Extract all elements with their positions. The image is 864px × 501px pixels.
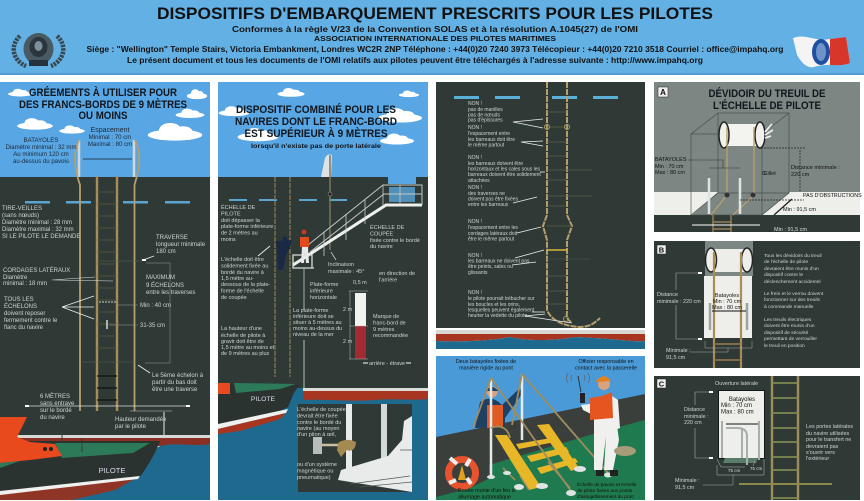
callout group 6: les barreaux ne doivent pas <box>468 258 530 264</box>
panel: deck arrangement <box>436 356 645 500</box>
label: officier <box>575 359 637 372</box>
labels: Œillet <box>762 171 776 177</box>
heading <box>19 86 187 122</box>
callout group 3 <box>468 155 545 184</box>
text block: du navire utilisées <box>806 431 849 437</box>
badge C: C <box>659 380 665 388</box>
label: 5e échelon: Le 5ème échelon à <box>152 373 204 379</box>
distance label: 220 cm <box>684 420 702 426</box>
ropes <box>711 127 754 215</box>
deck fittings <box>487 466 612 496</box>
callout group 1: pas de nœuds <box>468 112 500 118</box>
stanchions and ropes <box>473 374 608 491</box>
freeboard mark: 2 m <box>343 307 353 313</box>
badge A <box>658 87 668 97</box>
label: cordages latéraux <box>3 267 113 287</box>
freeboard mark <box>343 280 411 367</box>
label: batayoles: Au minimum 120 cm <box>13 151 69 158</box>
label: échelle de pilote: de 2 mètres au <box>221 230 258 236</box>
manhole <box>614 446 636 456</box>
text block: s'ouvrir vers <box>806 450 835 456</box>
ropes and rungs <box>714 252 741 368</box>
header banner <box>0 0 864 75</box>
lifebuoy <box>448 458 476 486</box>
distance label <box>657 272 704 340</box>
heading: EST SUPÉRIEUR À 9 MÈTRES <box>244 127 388 140</box>
label: échelle de pavois: de pilote fixées aux points <box>577 488 633 494</box>
association name: ASSOCIATION INTERNATIONALE DES PILOTES MARITIMES <box>314 34 556 43</box>
stanchion spacing label: Batayoles <box>715 293 739 299</box>
labels <box>655 157 862 233</box>
callout group 7 <box>468 290 572 323</box>
clouds <box>219 88 422 144</box>
inset: securing detail: pneumatique) <box>297 475 331 481</box>
minimum width label: 91,5 cm <box>675 485 695 491</box>
stanchions <box>710 303 747 330</box>
label: échelle de coupée: fixée contre le bordé <box>370 238 420 244</box>
label: plate-forme inférieure hauteur: niveau de la mer <box>293 332 334 338</box>
callout group 6: être peints, sales ou <box>468 264 513 270</box>
stanchion spacing label <box>712 293 746 311</box>
label: plate-forme inférieure hauteur: moins au-dessus du <box>293 326 342 332</box>
text block <box>806 424 853 462</box>
text block: devraient pas <box>806 444 839 450</box>
stanchion spacing label: Max : 80 cm <box>712 305 742 311</box>
deck dashes <box>229 199 347 201</box>
label: tire-veilles: (sans nœuds) <box>2 213 39 219</box>
label: fixation of ladder: 1,5 mètre au- <box>221 276 254 282</box>
labels: Min : 91,5 cm <box>774 227 807 233</box>
label: hauteur demandée <box>115 411 172 445</box>
label: batayoles: BATAYOLES <box>24 137 58 144</box>
label: tous les échelons <box>4 296 94 331</box>
freeboard mark: 9 mètres <box>373 327 395 333</box>
freeboard mark: 2 m <box>343 339 353 345</box>
stanchions <box>688 160 756 214</box>
heading: NAVIRES DONT LE FRANC-BORD <box>235 116 397 128</box>
reel <box>706 248 752 272</box>
label: batayoles <box>5 137 77 165</box>
text block: de l'échelle de pilote <box>764 259 808 265</box>
heading: L'ÉCHELLE DE PILOTE <box>713 99 821 112</box>
label: fixation of ladder: bordé du navire à <box>221 270 265 276</box>
inset: securing detail: d'un piton à œil, <box>297 432 336 438</box>
callout group 7: NON ! <box>468 290 482 296</box>
label: échelle de coupée: COUPÉE <box>370 230 394 238</box>
label: échelle de pilote: doit dépasser la <box>221 218 261 224</box>
officer figure <box>300 230 309 263</box>
text block: doivent être munis d'un <box>764 323 815 329</box>
text block: le treuil en position <box>764 343 805 349</box>
heading <box>235 103 397 150</box>
label: échelle de pilote <box>221 204 273 256</box>
ship hull and sea <box>218 383 428 500</box>
icon: IMO emblem <box>14 33 63 66</box>
freeboard mark: 0,5 m <box>353 280 367 286</box>
label: inclinaison <box>328 252 364 275</box>
label: traverse <box>142 235 206 261</box>
clouds <box>8 89 207 141</box>
distance label <box>684 391 713 459</box>
callout group 7: les boucles et les orins, <box>468 302 520 308</box>
callout group 5: l'espacement entre les <box>468 225 518 231</box>
label: plate-forme inférieure hauteur: inférieure doit se <box>293 314 334 320</box>
label: cordages latéraux: Diamètre <box>3 275 28 281</box>
label: échelle de pilote: moins <box>221 237 236 243</box>
distance label: minimale : <box>684 414 709 420</box>
wire box <box>691 113 789 215</box>
door opening: Min : 70 cm <box>721 403 752 409</box>
label: inclinaison: Inclinaison <box>328 262 354 268</box>
label: batayoles <box>456 359 516 372</box>
callout group 4: entre les barreaux <box>468 202 509 208</box>
distance label: Distance <box>657 292 678 298</box>
labels: Min : 91,5 cm <box>783 207 816 213</box>
pilot ladder diagram <box>75 140 142 411</box>
heading: DES FRANCS-BORDS DE 9 MÈTRES <box>19 98 187 111</box>
door opening <box>718 390 765 465</box>
defective ladder <box>543 82 600 327</box>
callout group 6: NON ! <box>468 253 482 259</box>
ship hull and sea: PILOTE <box>251 396 276 403</box>
hull strip <box>436 330 645 349</box>
dimensions under door: 75 cm <box>728 468 741 473</box>
callout group 5 <box>468 219 541 242</box>
callout group 1: pas de manilles <box>468 107 503 113</box>
door opening: Max : 80 cm <box>721 410 754 416</box>
callout group 7: heurter la vedette du pilote <box>468 313 527 319</box>
text block: devraient être munis d'un <box>764 266 819 272</box>
label: batayoles: Diamètre minimal : 32 mm <box>5 144 77 151</box>
label: fixation of ladder: L'échelle doit être <box>221 257 264 263</box>
labels: BATAYOLES <box>655 157 687 163</box>
text block: Les portes latérales <box>806 424 853 430</box>
door opening: Batayoles <box>729 397 755 403</box>
callout group 2: les barreaux doit être <box>468 137 515 143</box>
text block: Tous les dévidoirs du treuil <box>764 253 822 259</box>
label: tous les échelons: fermement contre le <box>4 318 58 324</box>
dimensions: rung length and spacing: Min : 40 cm <box>140 303 171 309</box>
heading: DÉVIDOIR DU TREUIL DE <box>708 87 826 100</box>
address line: Siège : "Wellington" Temple Stairs, Victoria Embankment, Londres WC2R 2NP Téléphone : +44(0)20 7240 3973 Télécopieur : +44(0)20 7210 3518 Courriel : office@impahq.org <box>86 45 784 54</box>
inset: securing detail: ou d'un système <box>297 462 337 468</box>
inset: securing detail: navire (au moyen <box>297 426 340 432</box>
callout group 3: NON ! <box>468 155 482 161</box>
label: tous les échelons: ÉCHELONS <box>4 303 37 310</box>
label: 6 mètres <box>25 393 190 421</box>
label: batayoles: au-dessus du pavois <box>13 158 69 165</box>
callout group 5: NON ! <box>468 219 482 225</box>
heading: GRÉEMENTS À UTILISER POUR <box>29 86 177 99</box>
label: fixation of ladder: forme de l'échelle <box>221 288 264 294</box>
inset: securing detail: contre le bordé du <box>297 420 341 426</box>
spacing dimension <box>83 127 132 159</box>
reel <box>719 122 773 148</box>
minimum width label: Minimale : <box>666 348 691 354</box>
label: tire-veilles: Diamètre maximal : 32 mm <box>2 227 74 233</box>
download line: Le présent document et tous les documents de l'OMI relatifs aux pilotes peuvent être téléchargés à l'adresse suivante : http://www.impahq.org <box>127 56 703 65</box>
text block: à commande manuelle <box>764 304 814 310</box>
label: direction: l'arrière <box>379 278 397 284</box>
distance label: Distance <box>684 407 705 413</box>
label: traverse: longueur minimale <box>156 242 206 248</box>
distance label: minimale : 220 cm <box>657 299 701 305</box>
subtitle: Conformes à la règle V/23 de la Convention SOLAS et à la résolution A.1045(27) de l'OMI <box>232 24 638 34</box>
label: 6 mètres: sur le bordé <box>40 408 72 414</box>
text block: dispositif contre le <box>764 272 803 278</box>
label: cordages latéraux: minimal : 18 mm <box>3 281 47 287</box>
accommodation ladder <box>293 185 422 310</box>
text block: déclenchement accidentel <box>764 279 821 285</box>
badge A: A <box>660 88 666 97</box>
pilot boat and sea <box>0 417 210 500</box>
spacing dimension: Espacement <box>91 127 130 134</box>
label: fixation of ladder: de coupée <box>221 295 247 301</box>
panel: combined arrangement <box>218 82 428 500</box>
label: hauteur échelle: gravir doit être de <box>221 339 264 345</box>
label: tous les échelons: TOUS LES <box>4 297 34 303</box>
label: traverse: 180 cm <box>156 249 176 255</box>
minimum width label <box>666 341 752 361</box>
pilot figure <box>276 236 292 270</box>
label: échelle de pilote: plate-forme inférieure <box>221 224 273 230</box>
dimension lines <box>692 148 805 231</box>
label: traverse: TRAVERSE <box>156 235 188 241</box>
callout group 7: le pilote pourrait trébucher sur <box>468 296 535 302</box>
callout group 5: cordages latéraux doit <box>468 231 518 237</box>
text block: pour le transfert ne <box>806 437 851 443</box>
label: hauteur échelle: de 9 mètres au plus <box>221 351 270 357</box>
panel: prohibited practices <box>436 82 645 349</box>
callout group 6: glissants <box>468 270 488 276</box>
label: tire-veilles: SI LE PILOTE LE DEMANDE <box>2 234 80 240</box>
label: fixation of ladder <box>221 257 270 301</box>
label: tire-veilles: TIRE-VEILLES <box>2 206 42 212</box>
label: hauteur échelle: La hauteur d'une <box>221 326 262 332</box>
heading: DISPOSITIF COMBINÉ POUR LES <box>236 103 396 116</box>
callout group 7: lesquelles peuvent également <box>468 308 535 314</box>
label: batayoles: manière rigide au pont <box>459 366 513 372</box>
heading <box>708 87 826 112</box>
callout group 4: NON ! <box>468 185 482 191</box>
freeboard mark: arrière - étrave <box>369 361 405 367</box>
label: échelle de pavois: d'assujettissement du pont <box>577 494 634 500</box>
label: échelle de pilote: ÉCHELLE DE <box>221 204 256 211</box>
label: direction: en direction de <box>379 271 415 277</box>
title: DISPOSITIFS D'EMBARQUEMENT PRESCRITS POUR LES PILOTES <box>157 5 713 23</box>
label: fixation of ladder: dessous de la plate- <box>221 282 270 288</box>
text block: dispositif de sécurité <box>764 330 809 336</box>
callout group 3: barreaux doivent être solidement <box>468 172 541 178</box>
davit <box>321 154 332 250</box>
label: plate-forme: inférieure <box>310 288 333 294</box>
deck dashes <box>25 201 190 204</box>
text block: permettant de verrouiller <box>764 336 817 342</box>
label: maximum 9 échelons: entre les traverses <box>146 290 195 296</box>
label: maximum 9 échelons: 9 ÉCHELONS <box>146 282 184 289</box>
label: hauteur échelle <box>221 326 275 357</box>
label: échelle de coupée <box>370 224 420 250</box>
label: 5e échelon: partir du bas doit <box>152 380 197 386</box>
label: direction <box>379 271 415 284</box>
callout group 2: le même partout <box>468 142 505 148</box>
badge B <box>657 245 666 254</box>
label: plate-forme inférieure hauteur <box>293 308 342 388</box>
side opening label: Ouverture latérale <box>715 381 758 387</box>
freeboard mark: recommandée <box>373 333 408 339</box>
label: tous les échelons: flanc du navire <box>4 325 44 331</box>
label: maximum 9 échelons <box>145 263 195 363</box>
label: plate-forme inférieure hauteur: La plate-forme <box>293 308 328 314</box>
dimensions: rung length and spacing: 31-35 cm <box>140 323 165 329</box>
panel C: side door <box>654 376 860 500</box>
callout group 2: l'espacement entre <box>468 131 510 137</box>
labels: PAS D'OBSTRUCTIONS <box>803 193 862 199</box>
dimensions: rung length and spacing <box>99 302 171 329</box>
panel: free-board 9 m or less <box>0 82 210 500</box>
label: échelle de coupée: du navire <box>370 244 393 250</box>
doorway <box>704 276 752 338</box>
callout group 1: NON ! <box>468 101 482 107</box>
callout group 4: des traverses ne <box>468 191 505 197</box>
label: hauteur échelle: échelle de pilote à <box>221 333 266 339</box>
label: officier: Officier responsable en <box>578 359 634 365</box>
callout group 1: pas d'épissures <box>468 118 503 124</box>
ladder foot <box>713 215 731 232</box>
spacing dimension: Maximal : 80 cm <box>88 141 132 148</box>
minimum width label <box>675 478 700 491</box>
callout group 2: NON ! <box>468 125 482 131</box>
badge B: B <box>659 246 665 254</box>
spacing dimension: Minimal : 70 cm <box>89 134 131 141</box>
stanchion spacing label: Min : 70 cm <box>713 299 742 305</box>
label: tire-veilles <box>2 206 80 240</box>
inset: securing detail: L'échelle de coupée <box>297 407 346 413</box>
label: plate-forme: Plate-forme <box>310 282 338 288</box>
label: officier: contact avec la passerelle <box>575 366 637 372</box>
callout group 3: attachées <box>468 178 490 184</box>
pilot boat and sea: PILOTE <box>99 466 125 475</box>
dimensions under door <box>703 459 764 485</box>
callout group 3: horizontaux et les cales sous les <box>468 166 540 172</box>
deck dashes <box>454 96 618 99</box>
label: inclinaison: maximale : 45° <box>328 269 364 275</box>
freeboard mark: Marque de <box>373 314 399 320</box>
heading: lorsqu'il n'existe pas de porte latérale <box>251 143 381 150</box>
label: hauteur demandée: Hauteur demandée <box>115 417 167 423</box>
label: fixation of ladder: solidement fixée au <box>221 264 268 270</box>
pilot ladder <box>275 177 290 377</box>
minimum width label: 91,5 cm <box>666 355 686 361</box>
text block: Les treuils électriques <box>764 317 812 323</box>
label: échelle de pilote: PILOTE <box>221 212 241 218</box>
panel A: winch reel <box>654 82 862 233</box>
callout group 4 <box>468 185 537 208</box>
label: plate-forme <box>310 282 338 301</box>
inset: securing detail: devrait être fixée <box>297 414 338 420</box>
label: cordages latéraux: CORDAGES LATÉRAUX <box>3 267 70 274</box>
label: 6 mètres: 6 MÈTRES <box>40 393 70 400</box>
label: échelle de coupée: ÉCHELLE DE <box>370 224 405 231</box>
labels: Min : 70 cm <box>655 164 684 170</box>
label: hauteur demandée: par le pilote <box>115 424 147 430</box>
label: tous les échelons: doivent reposer <box>4 311 45 317</box>
label: maximum 9 échelons: MAXIMUM <box>146 275 175 281</box>
callout group 5: être le même partout <box>468 236 515 242</box>
crew member behind bulwark <box>475 386 522 428</box>
dimensions under door: 75 cm <box>750 466 763 471</box>
label: plate-forme: horizontale <box>310 295 337 301</box>
label: bouée: Bouée munie d'un feu à <box>458 488 515 494</box>
label: plate-forme inférieure hauteur: situer à 5 mètres au <box>293 320 342 326</box>
label: tire-veilles: Diamètre minimal : 28 mm <box>2 220 72 226</box>
label: hauteur échelle: 1,5 mètre au moins et <box>221 345 275 351</box>
label: 5e échelon <box>138 365 204 393</box>
text block: Le frein et le verrou doivent <box>764 291 824 297</box>
label: 5e échelon: être une traverse <box>152 387 198 393</box>
officer <box>566 373 620 476</box>
labels: 220 cm <box>791 172 810 178</box>
icon: IMPA flag <box>793 36 850 67</box>
callout group 1 <box>468 101 543 128</box>
label: échelle de pavois: Échelle de pavois et échelle <box>577 481 637 488</box>
labels: Max : 80 cm <box>655 170 685 176</box>
callout group 4: doivent pas être fixées <box>468 196 519 202</box>
rope ladder <box>739 376 832 500</box>
freeboard mark: franc-bord de <box>373 320 406 326</box>
callout group 6 <box>468 250 544 276</box>
yellow pilot ladder <box>495 424 579 490</box>
panel B: winch reel aft view <box>654 241 860 368</box>
label: 6 mètres: sans entrave <box>40 401 75 407</box>
heading: OU MOINS <box>78 110 128 122</box>
text block: l'extérieur <box>806 456 829 462</box>
callout group 2 <box>468 125 543 148</box>
minimum width label: Minimale : <box>675 478 700 484</box>
label: bouée <box>458 488 515 500</box>
inset: securing detail: magnétique ou <box>297 468 333 474</box>
text block: fonctionner sur des treuils <box>764 297 821 303</box>
text block <box>764 253 824 349</box>
label: bouée: allumage automatique <box>458 494 511 500</box>
label: échelle de pavois <box>577 481 637 500</box>
label: 6 mètres: du navire <box>40 415 65 421</box>
labels: Distance minimale : <box>791 165 840 171</box>
label: batayoles: Deux batayoles fixées de <box>456 359 516 365</box>
inset: securing detail <box>297 404 412 492</box>
callout group 3: les barreaux doivent être <box>468 161 523 167</box>
badge C <box>657 379 666 388</box>
